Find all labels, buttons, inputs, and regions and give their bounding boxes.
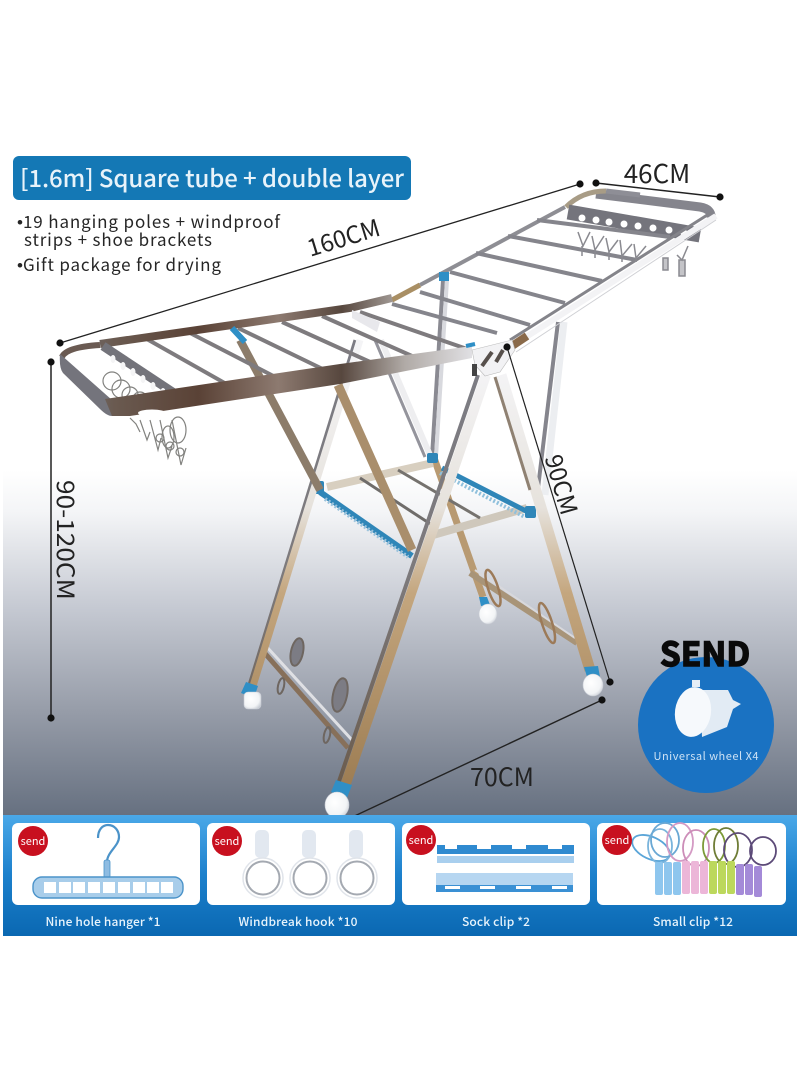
card: sock clip: Sock clip *2	[462, 913, 530, 930]
dimension: 160CM: 160CM	[302, 208, 384, 264]
feature list: •Gift package for drying	[17, 251, 221, 276]
card: sock clip: send	[409, 832, 433, 848]
right wing	[392, 191, 716, 352]
dimension: 70CM	[342, 696, 606, 824]
bottom shoe bars	[262, 568, 577, 748]
dimension: 90CM: 90CM	[538, 450, 588, 518]
universal wheel gift: SEND	[660, 628, 750, 676]
card: nine hole hanger	[12, 823, 200, 930]
gift panel	[3, 815, 797, 936]
card: windbreak hook	[207, 823, 395, 930]
dimension: 90-120CM: 90-120CM	[50, 480, 85, 600]
dimension: 46CM	[592, 154, 724, 201]
feature list: strips + shoe brackets	[24, 226, 212, 251]
wheels	[244, 604, 603, 818]
card: small clip	[597, 823, 786, 930]
centre hinge	[352, 272, 515, 376]
rear legs and supports	[375, 280, 564, 597]
icon: caster wheel	[672, 680, 741, 739]
card: sock clip	[402, 823, 590, 930]
card: nine hole hanger: send	[21, 833, 45, 849]
dimension: 90CM	[503, 343, 614, 686]
dimension: 46CM: 46CM	[624, 154, 690, 191]
title banner: [1.6m] Square tube + double layer	[20, 159, 404, 194]
left wing	[60, 298, 472, 465]
card: windbreak hook: Windbreak hook *10	[238, 913, 358, 930]
universal wheel gift: Universal wheel X4	[654, 748, 758, 764]
card: small clip: Small clip *12	[653, 913, 733, 930]
blue leg caps	[241, 597, 600, 798]
feature list: •19 hanging poles + windproof	[17, 208, 281, 233]
card: windbreak hook: send	[215, 833, 239, 849]
dimension: 70CM: 70CM	[470, 758, 534, 794]
lower shelf	[311, 453, 536, 557]
card: nine hole hanger: Nine hole hanger *1	[46, 913, 161, 930]
dimension: 90-120CM	[47, 358, 85, 722]
backdrop gradient	[3, 470, 797, 816]
crossed legs	[240, 340, 590, 792]
drying rack	[60, 191, 716, 818]
card: small clip: send	[605, 832, 629, 848]
universal wheel gift	[638, 628, 774, 793]
feature list	[17, 208, 281, 276]
dimension: 160CM	[56, 180, 584, 347]
